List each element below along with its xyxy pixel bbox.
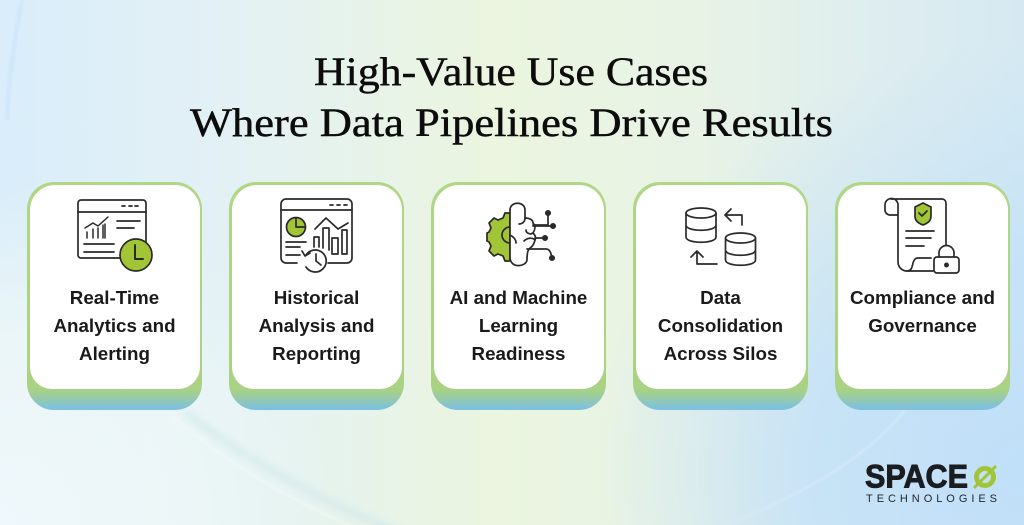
panel: real-time analytics — [27, 182, 202, 410]
icon: dashboard with clock — [77, 199, 153, 272]
icon: gear and brain — [486, 202, 556, 266]
icon: report with charts and history clock — [280, 198, 353, 273]
label — [53, 287, 176, 364]
label: Consolidation — [658, 315, 783, 336]
label — [850, 287, 995, 336]
label: Historical — [274, 287, 359, 308]
icon: databases and sync arrows — [685, 207, 756, 266]
label: Analysis and — [259, 315, 374, 336]
panel: compliance — [835, 182, 1010, 410]
panel: historical analysis — [229, 182, 404, 410]
label: Learning — [479, 315, 558, 336]
label: Alerting — [79, 343, 150, 364]
panel: data consolidation — [633, 182, 808, 410]
label: Readiness — [472, 343, 565, 364]
label: Governance — [868, 315, 977, 336]
label: AI and Machine — [450, 287, 587, 308]
label: Reporting — [272, 343, 361, 364]
title: Where Data Pipelines Drive Results — [190, 100, 833, 145]
logo: Space-O Technologies: TECHNOLOGIES — [866, 493, 997, 505]
title — [190, 49, 833, 145]
label — [450, 287, 587, 364]
icon: logo slashed O — [974, 466, 996, 488]
label: Across Silos — [664, 343, 777, 364]
panel: ai readiness — [431, 182, 606, 410]
logo: Space-O Technologies — [865, 461, 997, 505]
label: Analytics and — [53, 315, 176, 336]
label — [259, 287, 374, 364]
label: Data — [700, 287, 741, 308]
label — [658, 287, 783, 364]
label: Compliance and — [850, 287, 995, 308]
icon: scroll with shield and padlock — [884, 198, 960, 274]
label: Real-Time — [70, 287, 159, 308]
title: High-Value Use Cases — [314, 49, 708, 94]
